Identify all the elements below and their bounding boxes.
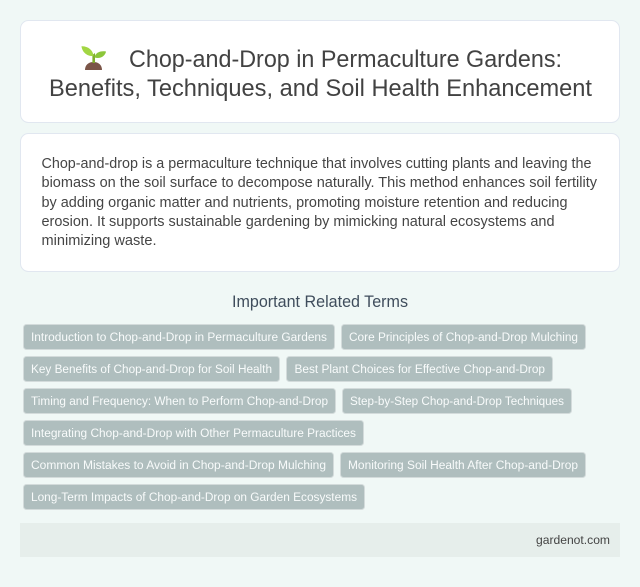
description text bbox=[42, 156, 598, 249]
tag: Integrating Chop-and-Drop with Other Permaculture Practices bbox=[31, 426, 356, 440]
description text: minimizing waste. bbox=[42, 233, 156, 249]
tag: Common Mistakes to Avoid in Chop-and-Drop Mulching bbox=[31, 458, 326, 472]
title: Benefits, Techniques, and Soil Health Enhancement bbox=[49, 75, 592, 102]
tag: Long-Term Impacts of Chop-and-Drop on Garden Ecosystems bbox=[31, 490, 357, 504]
tag: Step-by-Step Chop-and-Drop Techniques bbox=[350, 394, 564, 408]
tag bbox=[24, 452, 334, 478]
description text: erosion. It supports sustainable gardening by mimicking natural ecosystems and bbox=[42, 214, 554, 230]
tag bbox=[24, 324, 334, 350]
heading: related terms: Important Related Terms bbox=[232, 293, 408, 311]
tag bbox=[24, 388, 336, 414]
tag bbox=[342, 388, 572, 414]
tag: Best Plant Choices for Effective Chop-and-Drop bbox=[294, 362, 545, 376]
tag bbox=[342, 324, 586, 350]
tag: Introduction to Chop-and-Drop in Permaculture Gardens bbox=[31, 330, 327, 344]
related term tags bbox=[24, 324, 586, 510]
tag bbox=[24, 356, 280, 382]
tag bbox=[24, 484, 364, 510]
tag bbox=[286, 356, 552, 382]
tag: Key Benefits of Chop-and-Drop for Soil Health bbox=[31, 362, 272, 376]
description text: biomass on the soil surface to decompose naturally. This method enhances soil fertility bbox=[42, 175, 598, 191]
tag: Monitoring Soil Health After Chop-and-Drop bbox=[348, 458, 578, 472]
description text: Chop-and-drop is a permaculture technique that involves cutting plants and leaving the bbox=[42, 156, 592, 172]
tag bbox=[24, 420, 364, 446]
description text: by adding organic matter and nutrients, promoting moisture retention and reducing bbox=[42, 195, 568, 211]
title: Chop-and-Drop in Permaculture Gardens: bbox=[129, 46, 562, 73]
panel: title card bbox=[20, 20, 620, 122]
footer bbox=[20, 523, 620, 557]
tag: Timing and Frequency: When to Perform Chop-and-Drop bbox=[31, 394, 328, 408]
footer: gardenot.com bbox=[536, 533, 610, 547]
tag: Core Principles of Chop-and-Drop Mulching bbox=[349, 330, 578, 344]
panel: description card bbox=[20, 134, 620, 272]
tag bbox=[340, 452, 586, 478]
icon: seedling bbox=[82, 46, 106, 70]
title bbox=[49, 46, 592, 102]
